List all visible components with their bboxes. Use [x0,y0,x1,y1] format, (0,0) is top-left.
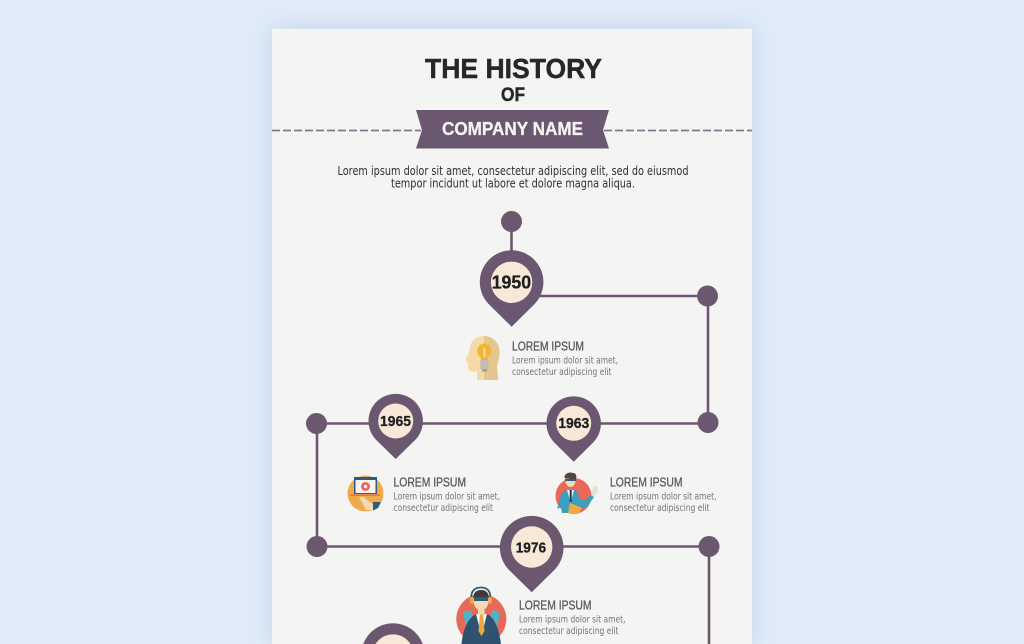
text: 1976 item: Lorem ipsum dolor sit amet, [519,614,626,626]
pin: 1950 [480,250,543,327]
text: 1963 item: LOREM IPSUM [610,476,682,490]
text: 1950 item: Lorem ipsum dolor sit amet, [512,356,618,366]
text: 1950 item: LOREM IPSUM [512,340,584,354]
text: 1976 item [519,598,626,637]
pin: 1976 [500,516,564,592]
icon: businessman with folder [556,472,598,514]
text: 1965 item: Lorem ipsum dolor sit amet, [394,492,500,502]
ribbon: company name [416,110,609,148]
pin: 1950: 1950 [492,272,531,292]
pin: 1963: 1963 [558,416,589,432]
intro text: tempor incidunt ut labore et dolore magna aliqua. [391,176,635,190]
pin: next milestone, cropped [363,623,423,644]
icon: head with light bulb [466,336,500,380]
icon: web page on a hand [348,476,384,512]
ribbon: company name: COMPANY NAME [442,119,583,139]
title: OF [501,85,525,106]
text: 1963 item [610,476,716,514]
text: 1965 item: LOREM IPSUM [394,476,466,490]
text: 1976 item: LOREM IPSUM [519,598,592,612]
text: 1976 item: consectetur adipiscing elit [519,626,619,637]
text: 1965 item: consectetur adipiscing elit [394,503,493,514]
pin: 1963 [546,396,601,462]
intro text [338,164,688,190]
text: 1963 item: Lorem ipsum dolor sit amet, [610,492,716,502]
panel: paper sheet [272,29,752,644]
pin: 1976: 1976 [516,540,546,556]
text: 1950 item [512,340,618,378]
title [425,53,602,106]
text: 1963 item: consectetur adipiscing elit [610,503,710,514]
timeline path [306,211,720,644]
intro text: Lorem ipsum dolor sit amet, consectetur adipiscing elit, sed do eiusmod [338,164,688,178]
pin: 1965 [368,394,423,459]
text: 1950 item: consectetur adipiscing elit [512,367,612,378]
text: 1965 item [394,476,500,514]
icon: support agent with headset [456,588,506,644]
title: THE HISTORY [425,53,602,84]
pin: 1965: 1965 [380,414,411,430]
dashed header line [272,130,752,132]
